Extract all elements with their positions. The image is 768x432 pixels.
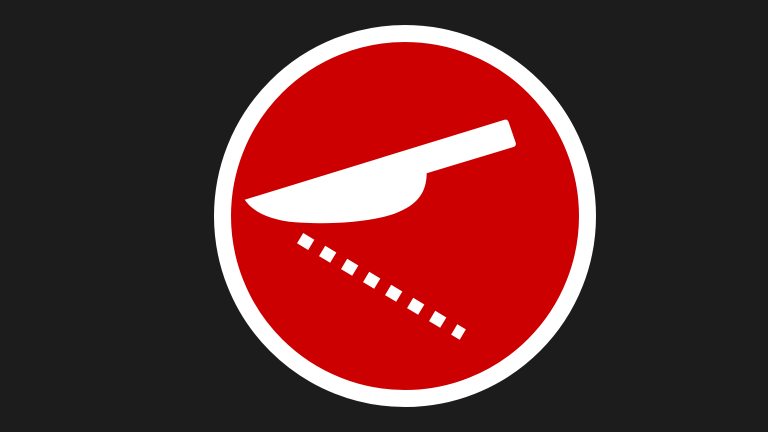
icon: knife [245,120,516,223]
icon: dotted cut line [297,233,466,340]
icon: red circle badge with white ring [222,34,588,398]
